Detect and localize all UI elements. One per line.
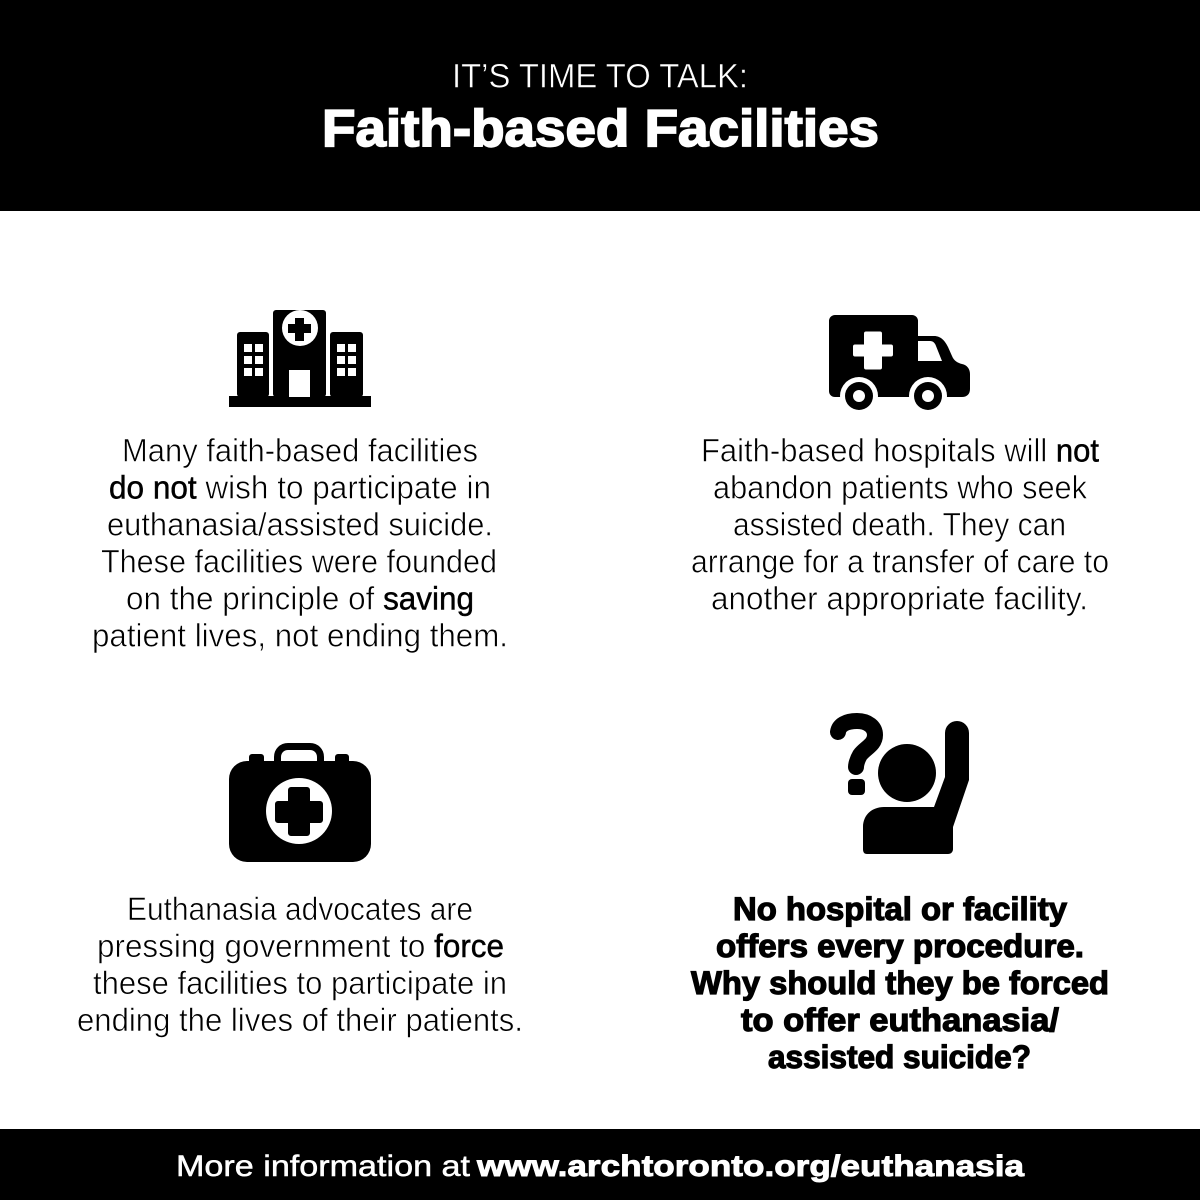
- text block: will not abandon: [691, 432, 1109, 616]
- footer link text: [176, 1150, 1024, 1183]
- text block: advocates: ending the lives of their patients.: [77, 1002, 523, 1038]
- text block: bold question: to offer euthanasia/: [741, 1002, 1059, 1038]
- text block: do not wish: [92, 432, 508, 654]
- text block: will not abandon: assisted death. They can: [733, 506, 1066, 542]
- text block: do not wish: do not wish to participate in: [109, 470, 491, 506]
- text block: do not wish: on the principle of saving: [126, 580, 474, 616]
- footer band: [0, 1129, 1200, 1200]
- text block: will not abandon: Faith-based hospitals will not: [701, 432, 1099, 468]
- icon: ambulance: [829, 315, 970, 415]
- text block: bold question: Why should they be forced: [691, 965, 1109, 1001]
- text block: do not wish: These facilities were founded: [101, 544, 497, 580]
- text block: will not abandon: another appropriate facility.: [711, 580, 1088, 616]
- kicker: IT’S TIME TO TALK:: [452, 58, 748, 96]
- panel: advocates pressing government: [77, 746, 523, 1038]
- footer link text: www.archtoronto.org/euthanasia: [476, 1150, 1024, 1183]
- text block: do not wish: Many faith-based facilities: [122, 432, 478, 468]
- title: Faith-based Facilities: [322, 100, 879, 158]
- text block: bold question: assisted suicide?: [768, 1039, 1031, 1075]
- text block: advocates: [77, 891, 523, 1038]
- text block: bold question: offers every procedure.: [716, 928, 1084, 964]
- text block: will not abandon: abandon patients who seek: [713, 470, 1088, 506]
- panel: no hospital offers every procedure: [691, 721, 1109, 1075]
- text block: advocates: pressing government to force: [97, 928, 504, 964]
- icon: raised hand with question mark: [838, 721, 969, 854]
- text block: advocates: Euthanasia advocates are: [127, 891, 473, 927]
- panel: will not abandon patients: [691, 315, 1109, 616]
- header band: [0, 0, 1200, 211]
- icon: first aid kit: [229, 746, 371, 862]
- panel: do not wish to participate: [92, 310, 508, 654]
- text block: do not wish: patient lives, not ending them.: [92, 618, 508, 654]
- footer link text: More information at: [176, 1150, 471, 1183]
- text block: bold question: No hospital or facility: [733, 891, 1067, 927]
- text block: advocates: these facilities to participate in: [93, 965, 507, 1001]
- text block: do not wish: euthanasia/assisted suicide.: [107, 506, 493, 542]
- text block: will not abandon: arrange for a transfer of care to: [691, 544, 1109, 580]
- icon: hospital: [229, 310, 371, 407]
- text block: bold question: [691, 891, 1109, 1075]
